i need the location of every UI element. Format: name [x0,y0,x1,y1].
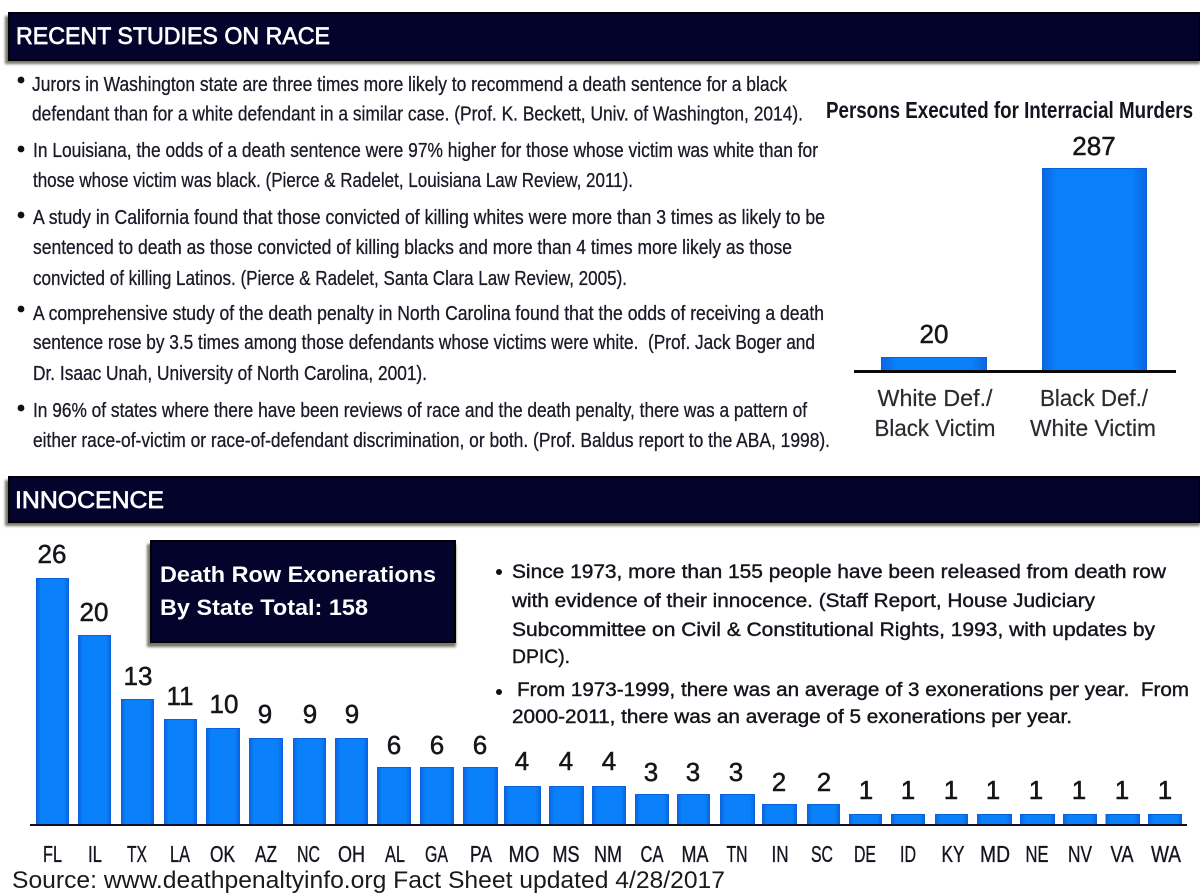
bar: black defendant white victim: White Victim [1030,415,1156,441]
value labels: 3 [729,757,743,787]
bullet: 155 people released: Subcommittee on Civil & Constitutional Rights, 1993, with updates by [512,620,1156,641]
value labels: 6 [473,730,487,760]
bullet: Washington jurors: defendant than for a white defendant in a similar case. (Prof. K. Beckett, Univ. of Washington, 2014). [32,102,803,126]
state labels: NC [297,841,320,867]
value labels: 1 [901,775,915,805]
value labels [38,539,1172,805]
value labels: 4 [559,746,573,776]
bar: black defendant white victim: 287 [1072,131,1116,161]
state labels: FL [43,841,62,867]
bullet: North Carolina study: A comprehensive study of the death penalty in North Carolina found that the odds of receiving a death [33,302,824,325]
state labels: TX [127,841,147,867]
callout: death row exonerations total [147,541,456,647]
bullet: Louisiana odds: In Louisiana, the odds of a death sentence were 97% higher for those whose victim was white than for [33,139,818,162]
bar: white defendant black victim: 20 [920,319,948,349]
callout: death row exonerations total: By State Total: 158 [160,595,368,620]
bullet: California study [18,206,825,290]
value labels: 9 [258,699,272,729]
state labels: TN [726,841,748,867]
bullet: average exonerations per year: 2000-2011, there was an average of 5 exonerations per year. [512,707,1072,728]
bar: white defendant black victim: Black Victim [874,415,996,441]
value labels: 1 [859,775,873,805]
state labels: AZ [255,841,277,867]
bullet: North Carolina study: sentence rose by 3.5 times among those defendants whose victims were white. (Prof. Jack Boger and [33,331,815,354]
bullet: 96 percent of states [18,399,830,452]
value labels: 13 [124,661,152,691]
state labels: KY [942,841,964,867]
state labels: WA [1151,841,1182,867]
value labels: 4 [602,746,616,776]
bullet: Washington jurors [18,73,803,126]
value labels: 10 [210,689,238,719]
bullet: 155 people released: with evidence of their innocence. (Staff Report, House Judiciary [511,591,1096,612]
state labels: GA [425,841,448,867]
bar: white defendant black victim: White Def./ [878,385,993,411]
bullet: North Carolina study [18,302,824,385]
bullet: California study: A study in California found that those convicted of killing whites were more than 3 times as likely to be [33,206,825,229]
text block: innocence facts [496,562,1189,728]
bars [36,578,1182,826]
state labels: IL [88,841,102,867]
value labels: 11 [166,681,194,711]
bullet: Louisiana odds [18,139,818,192]
bullet: 96 percent of states: In 96% of states where there have been reviews of race and the death penalty, there was a pattern of [33,399,807,422]
state labels: OK [210,841,235,867]
state labels: OH [338,841,365,867]
value labels: 1 [1072,775,1086,805]
state labels: VA [1110,841,1134,867]
bullet: California study: convicted of killing Latinos. (Pierce & Radelet, Santa Clara Law Review, 2005). [33,267,627,290]
bullet: 155 people released [496,562,1166,668]
state labels: MA [682,841,709,867]
bar: black defendant white victim [1030,131,1156,441]
bullet: average exonerations per year [496,680,1189,728]
state labels: NM [594,841,622,867]
bullet: Washington jurors: Jurors in Washington state are three times more likely to recommend a death sentence for a black [32,73,788,96]
state labels: NE [1026,841,1048,867]
bullet: California study: sentenced to death as those convicted of killing blacks and more than 4 times more likely as those [33,236,792,259]
panel: recent studies on race header: RECENT STUDIES ON RACE [16,23,330,50]
state labels: MD [980,841,1010,867]
state labels: AL [385,841,405,867]
bar: white defendant black victim [874,319,996,441]
state labels: ID [900,841,916,867]
state labels: MS [552,841,580,867]
state labels: IN [772,841,788,867]
panel: innocence header: INNOCENCE [15,487,164,514]
state labels: MO [508,841,540,867]
state labels: LA [170,841,190,867]
bullet: 155 people released: Since 1973, more than 155 people have been released from death row [512,562,1166,583]
bullet: North Carolina study: Dr. Isaac Unah, University of North Carolina, 2001). [33,362,427,385]
state labels: SC [811,841,833,867]
value labels: 1 [1029,775,1043,805]
state labels: NV [1068,841,1092,867]
state labels: CA [640,841,664,867]
value labels: 1 [1158,775,1172,805]
value labels: 9 [345,699,359,729]
value labels: 1 [944,775,958,805]
value labels: 3 [686,757,700,787]
value labels: 2 [817,767,831,797]
value labels: 6 [430,730,444,760]
value labels: 1 [986,775,1000,805]
bar chart: death row exonerations by state [30,539,1187,867]
bullet: 155 people released: DPIC). [512,647,570,668]
value labels: 3 [644,757,658,787]
value labels: 26 [38,539,66,569]
bullet: 96 percent of states: either race-of-victim or race-of-defendant discrimination, or both. (Prof. Baldus report to the ABA, 1998). [33,429,830,452]
state labels: PA [470,841,492,867]
state labels: DE [854,841,876,867]
value labels: 20 [80,597,108,627]
value labels: 1 [1115,775,1129,805]
bar chart: persons executed for interracial murders [826,97,1193,441]
state labels [43,841,1182,867]
bullet: Louisiana odds: those whose victim was black. (Pierce & Radelet, Louisiana Law Review, 2011). [33,169,633,192]
bullet: average exonerations per year: From 1973-1999, there was an average of 3 exonerations per year. From [517,680,1189,701]
value labels: 6 [387,730,401,760]
value labels: 9 [303,699,317,729]
panel: innocence header [5,477,1200,526]
value labels: 4 [515,746,529,776]
panel: recent studies on race header [5,13,1200,64]
callout: death row exonerations total: Death Row Exonerations [160,562,436,587]
value labels: 2 [772,767,786,797]
text block: race study findings [18,73,830,452]
bar: black defendant white victim: Black Def./ [1040,385,1149,411]
